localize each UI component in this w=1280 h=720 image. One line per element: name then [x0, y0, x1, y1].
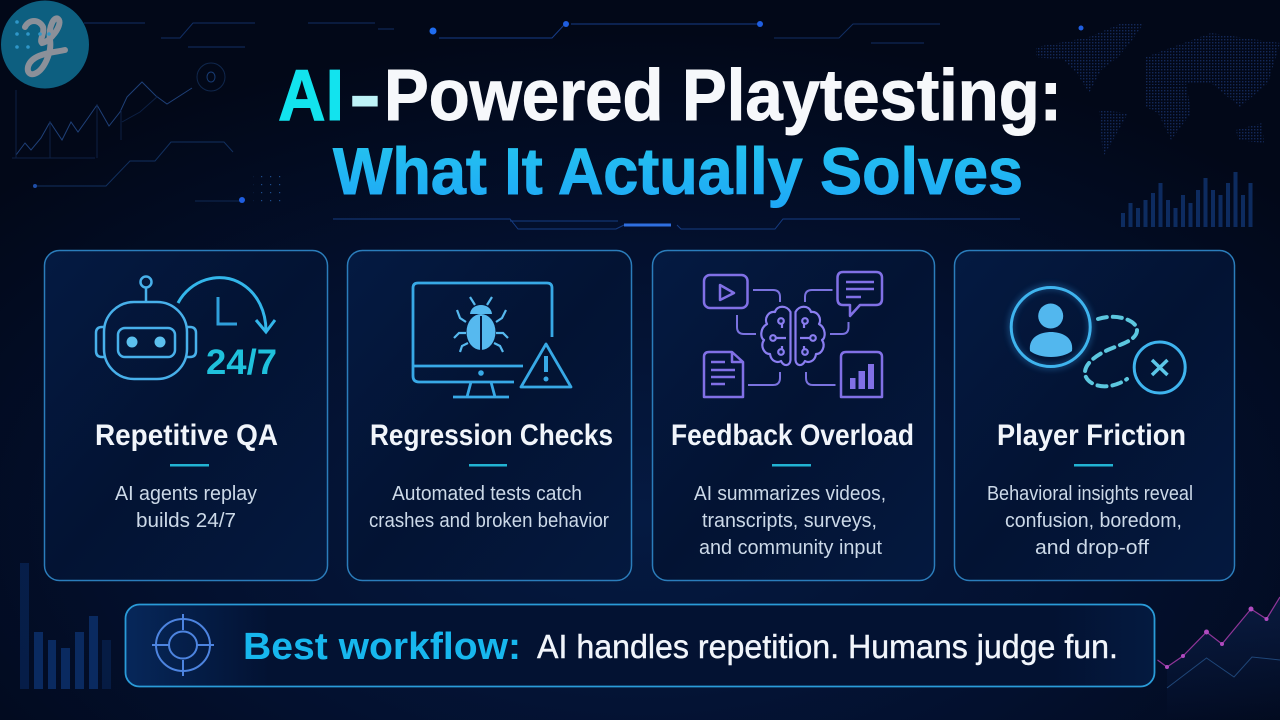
left line chart backdrop — [12, 82, 192, 158]
heading: Player Friction — [997, 419, 1186, 452]
description: and community input — [699, 537, 882, 559]
message: AI handles repetition. Humans judge fun. — [537, 628, 1118, 665]
panel: Repetitive QA — [44, 250, 328, 580]
icon: monitor with bug and warning — [413, 283, 571, 397]
icon: target — [152, 614, 214, 676]
title: Powered Playtesting: — [384, 56, 1062, 136]
bars backdrop right — [1121, 172, 1252, 227]
heading: Regression Checks — [370, 419, 613, 452]
description: crashes and broken behavior — [369, 510, 609, 532]
label: Best workflow: — [243, 626, 521, 668]
description — [694, 483, 886, 559]
bars backdrop left — [20, 563, 111, 689]
title: AI — [278, 56, 344, 136]
description: AI agents replay — [115, 483, 257, 505]
icon: robot with 24/7 clock — [96, 276, 277, 382]
description: AI summarizes videos, — [694, 483, 886, 505]
panel: Feedback Overload — [652, 250, 934, 580]
description: confusion, boredom, — [1005, 510, 1182, 532]
description: transcripts, surveys, — [702, 510, 877, 532]
title: What It Actually Solves — [333, 134, 1023, 208]
world map backdrop — [1030, 20, 1280, 160]
description — [987, 483, 1193, 559]
line chart backdrop bottom right — [1158, 597, 1280, 720]
panel: Player Friction — [954, 250, 1234, 580]
title — [278, 56, 1062, 208]
description: builds 24/7 — [136, 510, 236, 532]
description: Behavioral insights reveal — [987, 483, 1193, 505]
icon: player and drop-off — [1011, 287, 1185, 393]
heading: Feedback Overload — [671, 419, 914, 452]
description: Automated tests catch — [392, 483, 582, 505]
callout: best workflow — [126, 604, 1154, 686]
icon: robot with 24/7 clock: 24/7 — [206, 343, 277, 382]
icon: brain with media inputs — [704, 272, 882, 397]
description: and drop-off — [1035, 537, 1149, 559]
logo badge — [1, 0, 89, 88]
description — [115, 483, 257, 532]
title: - — [350, 56, 380, 136]
panel: Regression Checks — [348, 250, 632, 580]
heading: Repetitive QA — [95, 419, 278, 452]
decorative circuit lines top — [33, 21, 1084, 229]
description — [369, 483, 609, 532]
